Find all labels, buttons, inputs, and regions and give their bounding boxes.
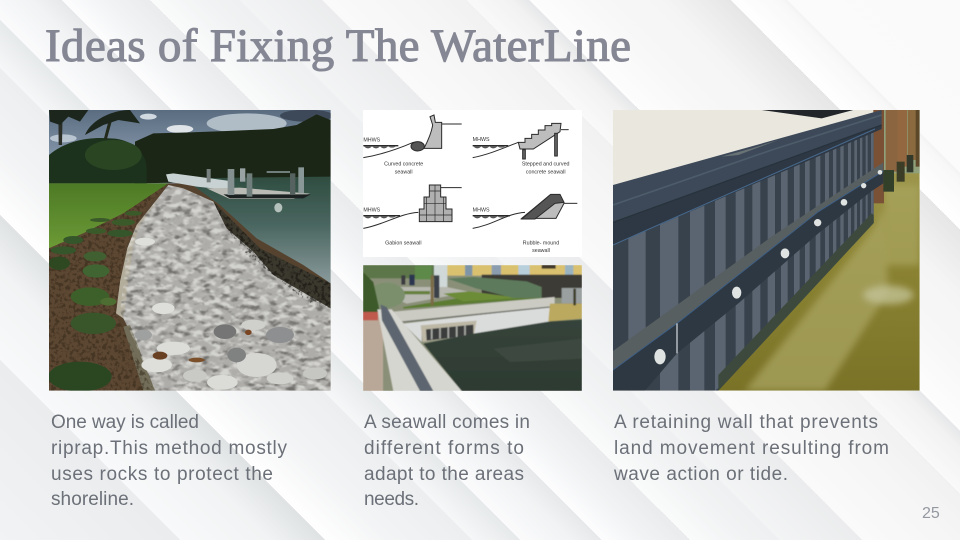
- diagram: curved concrete seawall: seawall: [395, 169, 413, 175]
- diagram: rubble-mound seawall: [473, 194, 577, 254]
- diagram panel: seawall types: [363, 110, 582, 257]
- diagram: stepped and curved concrete seawall: [473, 123, 570, 175]
- caption: riprap: [51, 412, 288, 510]
- water reflections: [745, 185, 920, 391]
- diagram: gabion seawall: Gabion seawall: [385, 240, 422, 246]
- rock texture: [135, 238, 327, 390]
- diagram: rubble-mound seawall: Rubble- mound: [523, 240, 559, 246]
- diagram: curved concrete seawall: MHWS: [363, 138, 381, 144]
- sheet pile wall: [613, 129, 874, 391]
- caption: seawall: different forms to: [364, 438, 524, 459]
- caption: retaining wall: [613, 412, 889, 485]
- diagram: stepped and curved concrete seawall: Stepped and curved: [522, 162, 570, 168]
- caption: seawall: A seawall comes in: [364, 412, 530, 433]
- mulch speckle: [49, 183, 168, 391]
- dock and gangway: [166, 167, 311, 199]
- photo: vinyl sheet pile retaining wall: [613, 110, 920, 391]
- caption: riprap: riprap.This method mostly: [51, 438, 288, 459]
- sand above the wall: [613, 110, 883, 187]
- diagram: stepped and curved concrete seawall: MHWS: [473, 137, 490, 143]
- photo: concrete seawall and canal: [363, 265, 582, 391]
- caption: riprap: shoreline.: [51, 489, 134, 510]
- caption: retaining wall: land movement resulting from: [614, 438, 889, 459]
- ground-cover shrubs: [48, 211, 142, 392]
- diagram: stepped and curved concrete seawall: concrete seawall: [526, 169, 566, 175]
- caption: seawall: [364, 412, 530, 510]
- caption: retaining wall: A retaining wall that prevents: [614, 412, 878, 433]
- title: Ideas of Fixing The WaterLine: [45, 20, 631, 72]
- diagram: gabion seawall: MHWS: [363, 208, 381, 214]
- diagram: rubble-mound seawall: MHWS: [473, 208, 490, 214]
- caption: retaining wall: wave action or tide.: [613, 464, 788, 485]
- page number: 25: [922, 505, 940, 522]
- caption: riprap: uses rocks to protect the: [51, 464, 273, 485]
- timber piles: [873, 110, 920, 203]
- diagram: curved concrete seawall: [363, 115, 462, 175]
- caption: seawall: needs.: [364, 489, 419, 510]
- cap beam: [613, 110, 882, 222]
- wale beam: [613, 162, 883, 370]
- wale bolts: [654, 170, 882, 364]
- diagram: gabion seawall: [363, 185, 462, 246]
- rock shadows and highlights: [120, 185, 331, 391]
- fallen leaves: [153, 330, 252, 362]
- caption: riprap: One way is called: [51, 412, 199, 433]
- photo: riprap shoreline: [48, 110, 333, 392]
- caption: seawall: adapt to the areas: [364, 464, 524, 485]
- diagram: curved concrete seawall: Curved concrete: [384, 162, 423, 168]
- diagram: rubble-mound seawall: seawall: [532, 248, 550, 254]
